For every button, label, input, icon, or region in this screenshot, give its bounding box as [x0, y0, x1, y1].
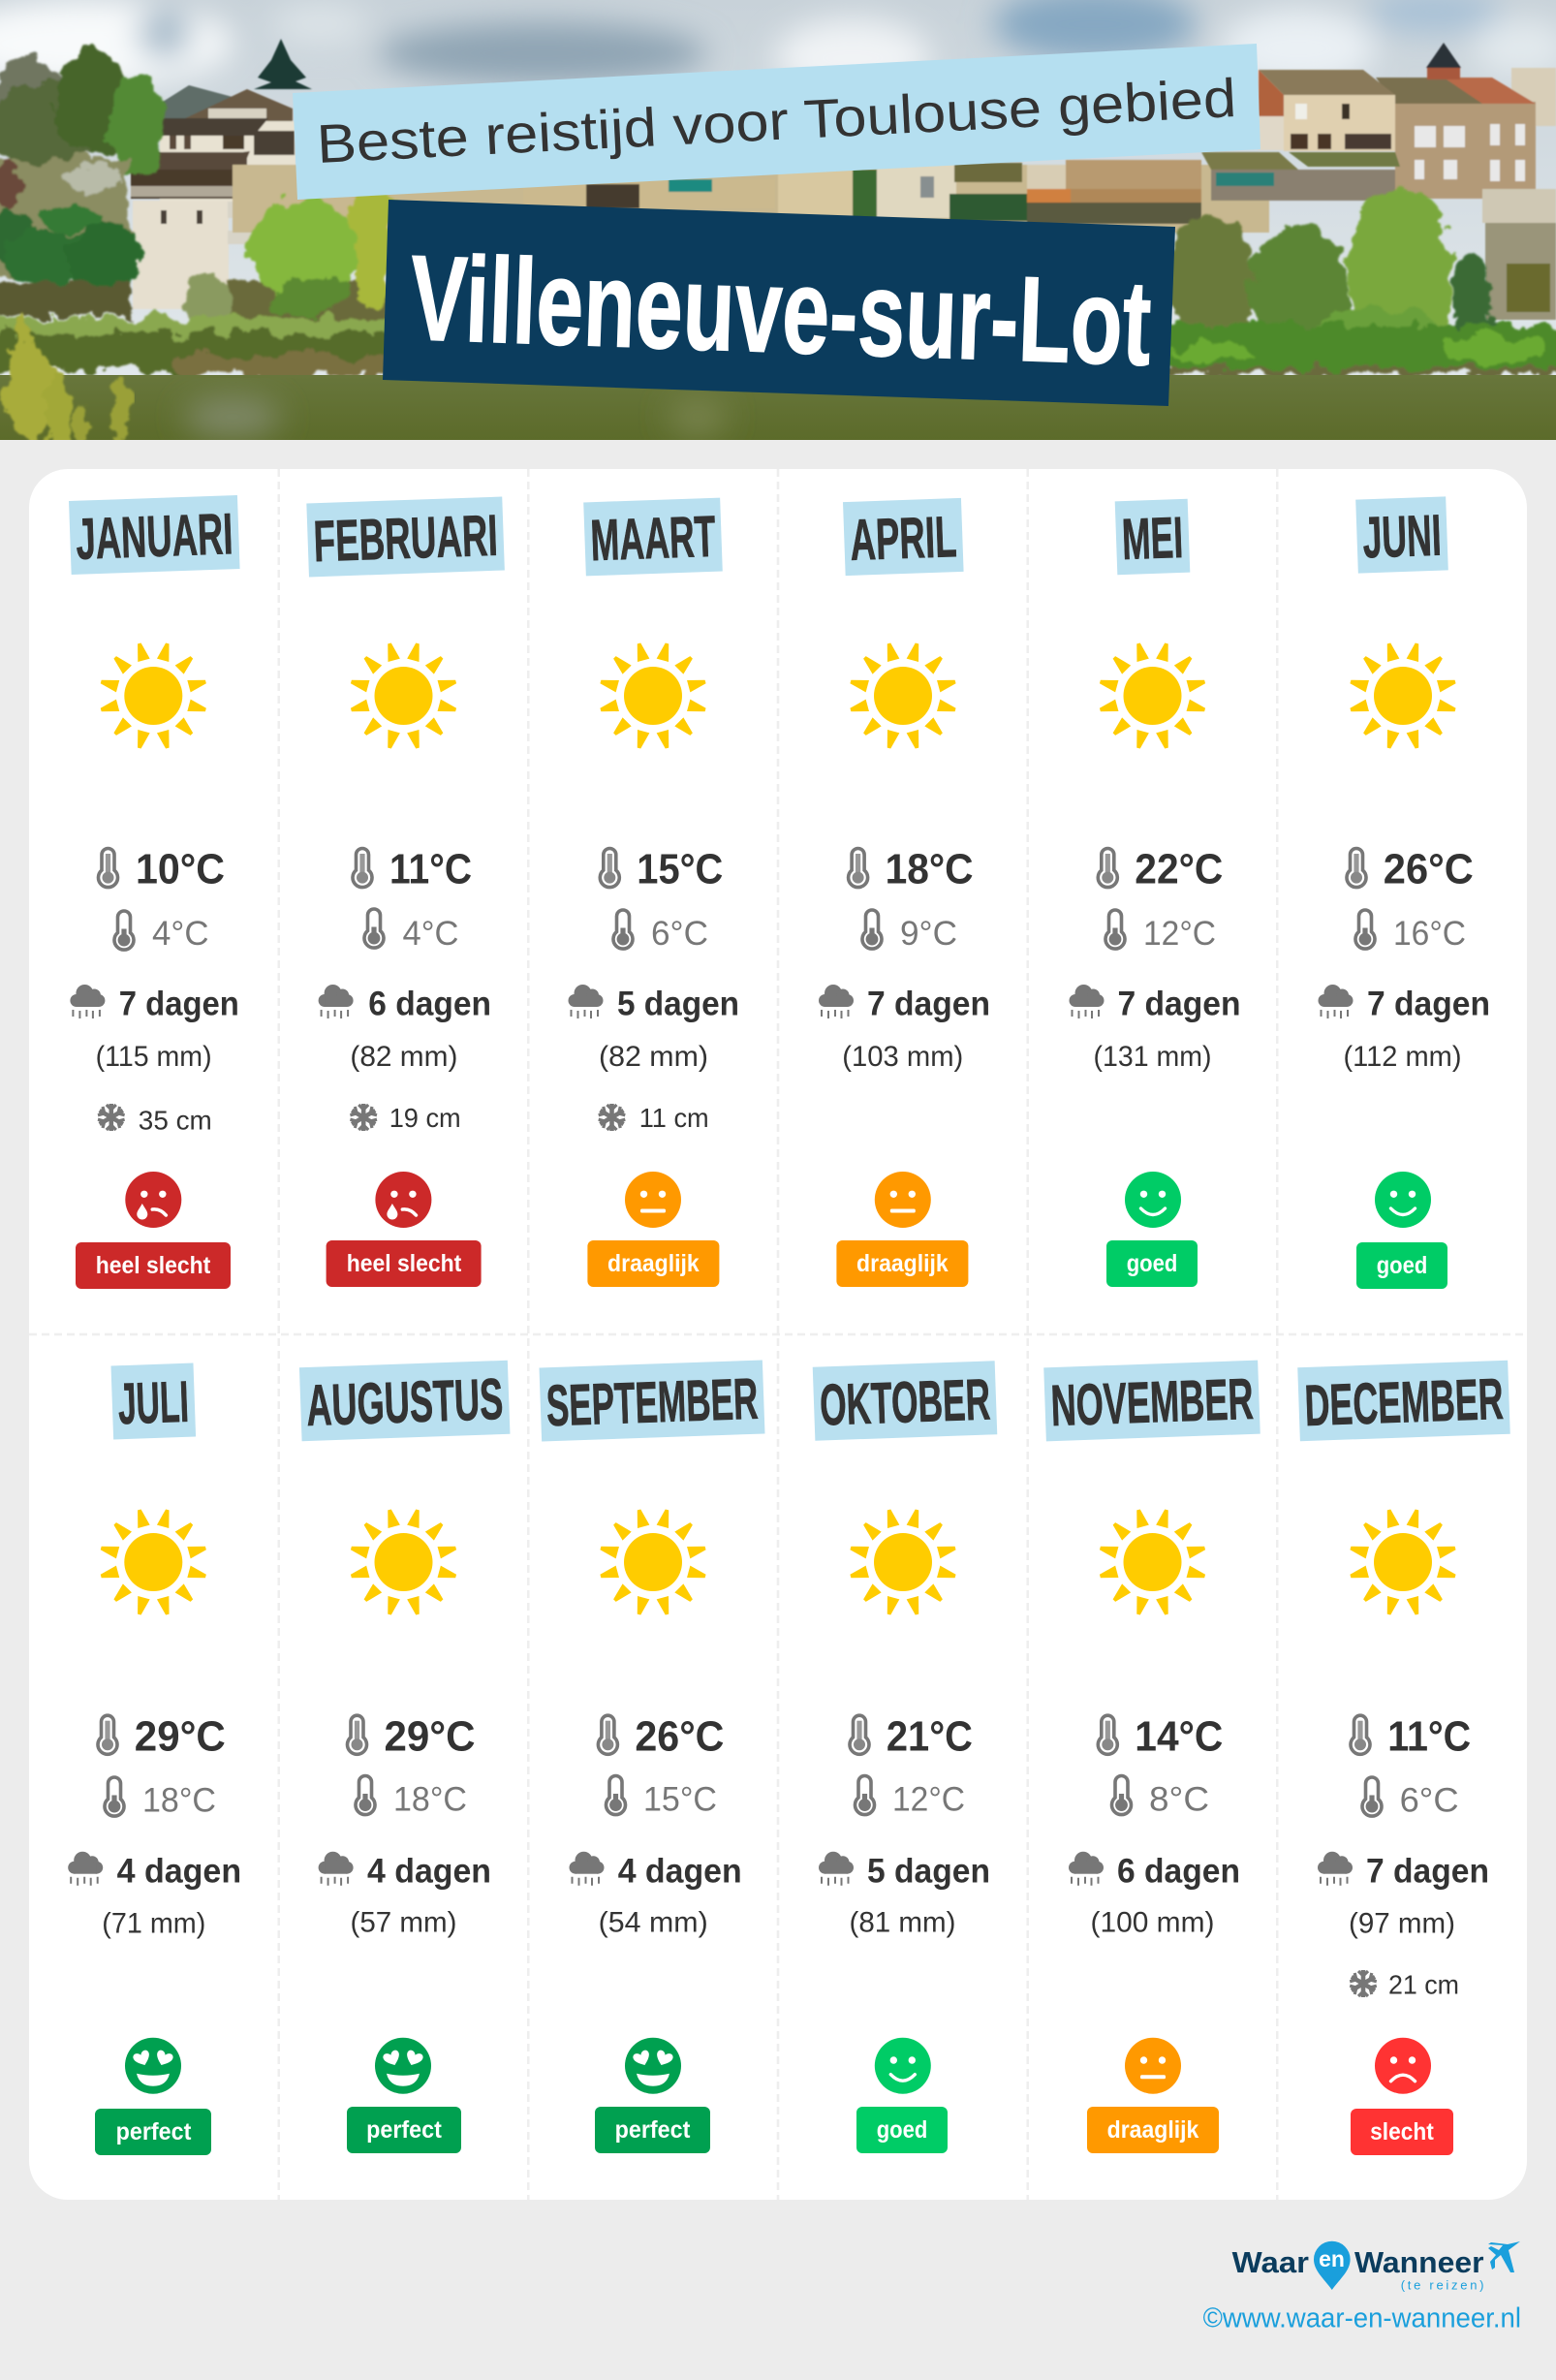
month: juli — [68, 1363, 241, 2155]
rain days: 7 dagen — [867, 986, 990, 1023]
low temperature — [607, 1775, 717, 1818]
low temperature: 8°C — [1149, 1781, 1209, 1818]
high temperature: 18°C — [886, 846, 974, 893]
low temperature — [114, 911, 209, 953]
snowfall — [98, 1104, 212, 1136]
label: september — [539, 1361, 765, 1441]
high temperature: 10°C — [136, 846, 225, 893]
logo: Waar en Wanneer — [1232, 2241, 1520, 2293]
high temperature: 29°C — [384, 1712, 475, 1760]
month: december — [1297, 1361, 1510, 2155]
rain days — [1318, 985, 1490, 1023]
month: april — [819, 498, 990, 1287]
rain days: 4 dagen — [117, 1852, 241, 1890]
low temperature: 4°C — [403, 915, 459, 953]
label: mei — [1115, 499, 1190, 575]
rainfall: (97 mm) — [1349, 1908, 1455, 1940]
mood: perfect — [375, 2038, 431, 2094]
month: mei — [1070, 499, 1240, 1287]
label: augustus — [299, 1361, 510, 1441]
label: januari: JANUARI — [75, 501, 233, 572]
label: februari: FEBRUARI — [313, 503, 499, 574]
rainfall: (115 mm) — [96, 1041, 212, 1073]
low temperature: 16°C — [1393, 915, 1466, 953]
mood: good — [1125, 1172, 1181, 1228]
badge: heel slecht — [76, 1242, 231, 1289]
mood: very bad — [375, 1172, 431, 1228]
label: november: NOVEMBER — [1049, 1366, 1255, 1438]
snowfall — [350, 1103, 461, 1133]
snowfall: 11 cm — [639, 1103, 709, 1133]
website url: ©www.waar-en-wanneer.nl — [1203, 2303, 1521, 2334]
low temperature — [105, 1777, 216, 1820]
rain days: 5 dagen — [617, 986, 739, 1023]
high temperature — [98, 1712, 226, 1760]
mood: good — [875, 2038, 931, 2094]
rainfall: (82 mm) — [350, 1041, 457, 1073]
rain days — [1069, 1852, 1240, 1890]
low temperature: 6°C — [651, 915, 708, 953]
low temperature — [1355, 910, 1466, 953]
low temperature — [855, 1775, 965, 1818]
rainfall: (81 mm) — [849, 1907, 955, 1939]
title band — [383, 200, 1175, 406]
icon: map pin: en — [1319, 2246, 1345, 2271]
low temperature — [356, 1775, 467, 1818]
snowfall — [1350, 1970, 1459, 2000]
mood: bad — [1375, 2038, 1431, 2094]
high temperature — [1347, 846, 1474, 893]
title band: Villeneuve-sur-Lot — [408, 231, 1153, 391]
rain days: 6 dagen — [368, 986, 491, 1023]
rainfall: (103 mm) — [842, 1041, 963, 1073]
badge: goed: goed — [1377, 1252, 1427, 1279]
low temperature: 9°C — [900, 915, 957, 953]
badge: perfect: perfect — [116, 2118, 192, 2145]
rainfall: (100 mm) — [1091, 1907, 1215, 1939]
rain days — [319, 985, 491, 1023]
badge: draaglijk: draaglijk — [856, 1250, 949, 1277]
badge: slecht — [1351, 2109, 1453, 2155]
mood: tolerable — [625, 1172, 681, 1228]
month: maart — [568, 498, 739, 1287]
low temperature — [613, 910, 708, 953]
river — [0, 375, 1556, 440]
high temperature — [1098, 846, 1223, 893]
high temperature: 21°C — [887, 1712, 973, 1760]
low temperature: 18°C — [142, 1781, 216, 1820]
snowfall: 21 cm — [1388, 1970, 1459, 2000]
icon: sun — [100, 642, 207, 750]
logo: Waar en Wanneer: (te reizen) — [1401, 2278, 1484, 2293]
mood: tolerable — [875, 1172, 931, 1228]
badge: draaglijk: draaglijk — [1107, 2116, 1198, 2144]
snowfall — [599, 1103, 709, 1133]
label: oktober: OKTOBER — [819, 1366, 991, 1438]
subtitle band: Beste reistijd voor Toulouse gebied — [315, 67, 1237, 174]
rainfall: (54 mm) — [599, 1907, 708, 1939]
rain days — [319, 1852, 491, 1890]
icon: sun — [599, 642, 707, 750]
badge: heel slecht: heel slecht — [96, 1252, 211, 1279]
badge: goed — [856, 2107, 948, 2153]
rain days: 7 dagen — [119, 986, 239, 1023]
foreground bush — [4, 312, 131, 451]
label: maart — [583, 498, 723, 576]
icon: sun — [599, 1508, 707, 1616]
month: september — [539, 1361, 765, 2153]
low temperature: 15°C — [643, 1781, 717, 1818]
subtitle band — [293, 44, 1260, 200]
icon: plane — [1488, 2241, 1520, 2272]
icon: sun — [1349, 642, 1457, 750]
rain days — [819, 1852, 990, 1890]
rain days: 4 dagen — [367, 1852, 491, 1890]
high temperature: 11°C — [389, 846, 472, 893]
rain days: 7 dagen — [1366, 1852, 1489, 1890]
mood: perfect — [625, 2038, 681, 2094]
low temperature: 18°C — [393, 1781, 467, 1818]
label: september: SEPTEMBER — [545, 1366, 759, 1438]
badge: goed — [1356, 1242, 1447, 1289]
label: juni — [1355, 496, 1448, 574]
badge: perfect — [95, 2109, 211, 2155]
mood: very bad — [125, 1172, 181, 1228]
rain days — [68, 1852, 241, 1890]
low temperature: 6°C — [1400, 1781, 1459, 1820]
icon: sun — [849, 642, 957, 750]
high temperature — [347, 1712, 475, 1760]
badge: perfect — [347, 2107, 461, 2153]
low temperature — [862, 910, 957, 953]
icon: sun — [1349, 1508, 1457, 1616]
logo: Waar en Wanneer: Wanneer — [1354, 2245, 1484, 2279]
high temperature: 22°C — [1135, 846, 1223, 893]
low temperature: 4°C — [152, 915, 209, 953]
high temperature: 14°C — [1135, 1712, 1223, 1760]
high temperature: 29°C — [135, 1712, 226, 1760]
icon: sun — [100, 1508, 207, 1616]
month: februari — [306, 496, 505, 1287]
buildings — [131, 39, 1556, 320]
badge: goed — [1106, 1240, 1198, 1287]
rainfall: (82 mm) — [599, 1041, 708, 1073]
badge: slecht: slecht — [1370, 2118, 1434, 2145]
vegetation — [0, 48, 1556, 375]
header photo: Villeneuve-sur-Lot riverside — [0, 0, 1556, 451]
high temperature: 26°C — [1384, 846, 1474, 893]
rain days — [819, 985, 990, 1023]
icon: map pin — [1314, 2241, 1351, 2290]
badge: draaglijk — [1087, 2107, 1219, 2153]
label: juli: JULI — [117, 1369, 190, 1436]
rainfall: (112 mm) — [1343, 1041, 1461, 1073]
icon: sun — [350, 1508, 457, 1616]
high temperature — [598, 1712, 724, 1760]
month: juni — [1318, 496, 1490, 1289]
rain days — [1318, 1852, 1489, 1890]
rainfall: (71 mm) — [102, 1908, 205, 1940]
rain days: 5 dagen — [867, 1852, 990, 1890]
rainfall: (131 mm) — [1093, 1041, 1211, 1073]
rain days — [568, 985, 739, 1023]
label: juli — [110, 1363, 196, 1439]
badge: perfect: perfect — [615, 2116, 691, 2144]
badge: draaglijk — [836, 1240, 968, 1287]
badge: heel slecht: heel slecht — [347, 1250, 462, 1277]
low temperature — [364, 909, 459, 953]
month: augustus — [299, 1361, 510, 2153]
mood: good — [1375, 1172, 1431, 1228]
label: maart: MAART — [589, 504, 717, 573]
rain days — [70, 985, 239, 1023]
low temperature — [1362, 1777, 1459, 1820]
badge: perfect: perfect — [366, 2116, 442, 2144]
mood: tolerable — [1125, 2038, 1181, 2094]
label: augustus: AUGUSTUS — [305, 1366, 504, 1438]
badge: goed: goed — [1127, 1250, 1177, 1277]
month: oktober — [813, 1361, 997, 2153]
high temperature — [99, 846, 225, 893]
label: juni: JUNI — [1361, 503, 1443, 570]
badge: heel slecht — [327, 1240, 482, 1287]
rain days: 7 dagen — [1367, 986, 1490, 1023]
high temperature: 15°C — [637, 846, 723, 893]
month: november — [1043, 1361, 1260, 2153]
low temperature: 12°C — [1143, 915, 1216, 953]
icon: sun — [1099, 1508, 1206, 1616]
low temperature — [1112, 1775, 1209, 1818]
high temperature — [600, 846, 723, 893]
icon: sun — [350, 642, 457, 750]
high temperature — [353, 846, 472, 893]
snowfall: 19 cm — [389, 1103, 461, 1133]
label: november — [1043, 1361, 1260, 1441]
high temperature: 26°C — [635, 1712, 724, 1760]
high temperature — [849, 846, 974, 893]
badge: draaglijk — [587, 1240, 719, 1287]
badge: draaglijk: draaglijk — [607, 1250, 700, 1277]
low temperature: 12°C — [892, 1781, 965, 1818]
label: januari — [69, 495, 240, 575]
label: mei: MEI — [1121, 505, 1184, 572]
rain days: 6 dagen — [1117, 1852, 1240, 1890]
rain days: 7 dagen — [1118, 986, 1240, 1023]
low temperature — [1105, 910, 1216, 953]
label: februari — [306, 496, 505, 578]
label: oktober — [813, 1361, 997, 1441]
high temperature — [1351, 1712, 1471, 1760]
high temperature — [850, 1712, 973, 1760]
rain days: 4 dagen — [618, 1852, 742, 1890]
rain days — [570, 1852, 742, 1890]
rain days — [1070, 985, 1240, 1023]
logo: Waar en Wanneer: Waar — [1232, 2245, 1309, 2279]
badge: perfect — [595, 2107, 710, 2153]
icon: sun — [849, 1508, 957, 1616]
badge: goed: goed — [877, 2116, 927, 2144]
high temperature — [1098, 1712, 1223, 1760]
high temperature: 11°C — [1387, 1712, 1471, 1760]
month: januari — [69, 495, 240, 1289]
mood: perfect — [125, 2038, 181, 2094]
icon: sun — [1099, 642, 1206, 750]
rainfall: (57 mm) — [351, 1907, 457, 1939]
panel: month grid — [29, 469, 1527, 2200]
snowfall: 35 cm — [139, 1106, 212, 1136]
label: april: APRIL — [849, 504, 957, 573]
label: april — [843, 498, 964, 576]
